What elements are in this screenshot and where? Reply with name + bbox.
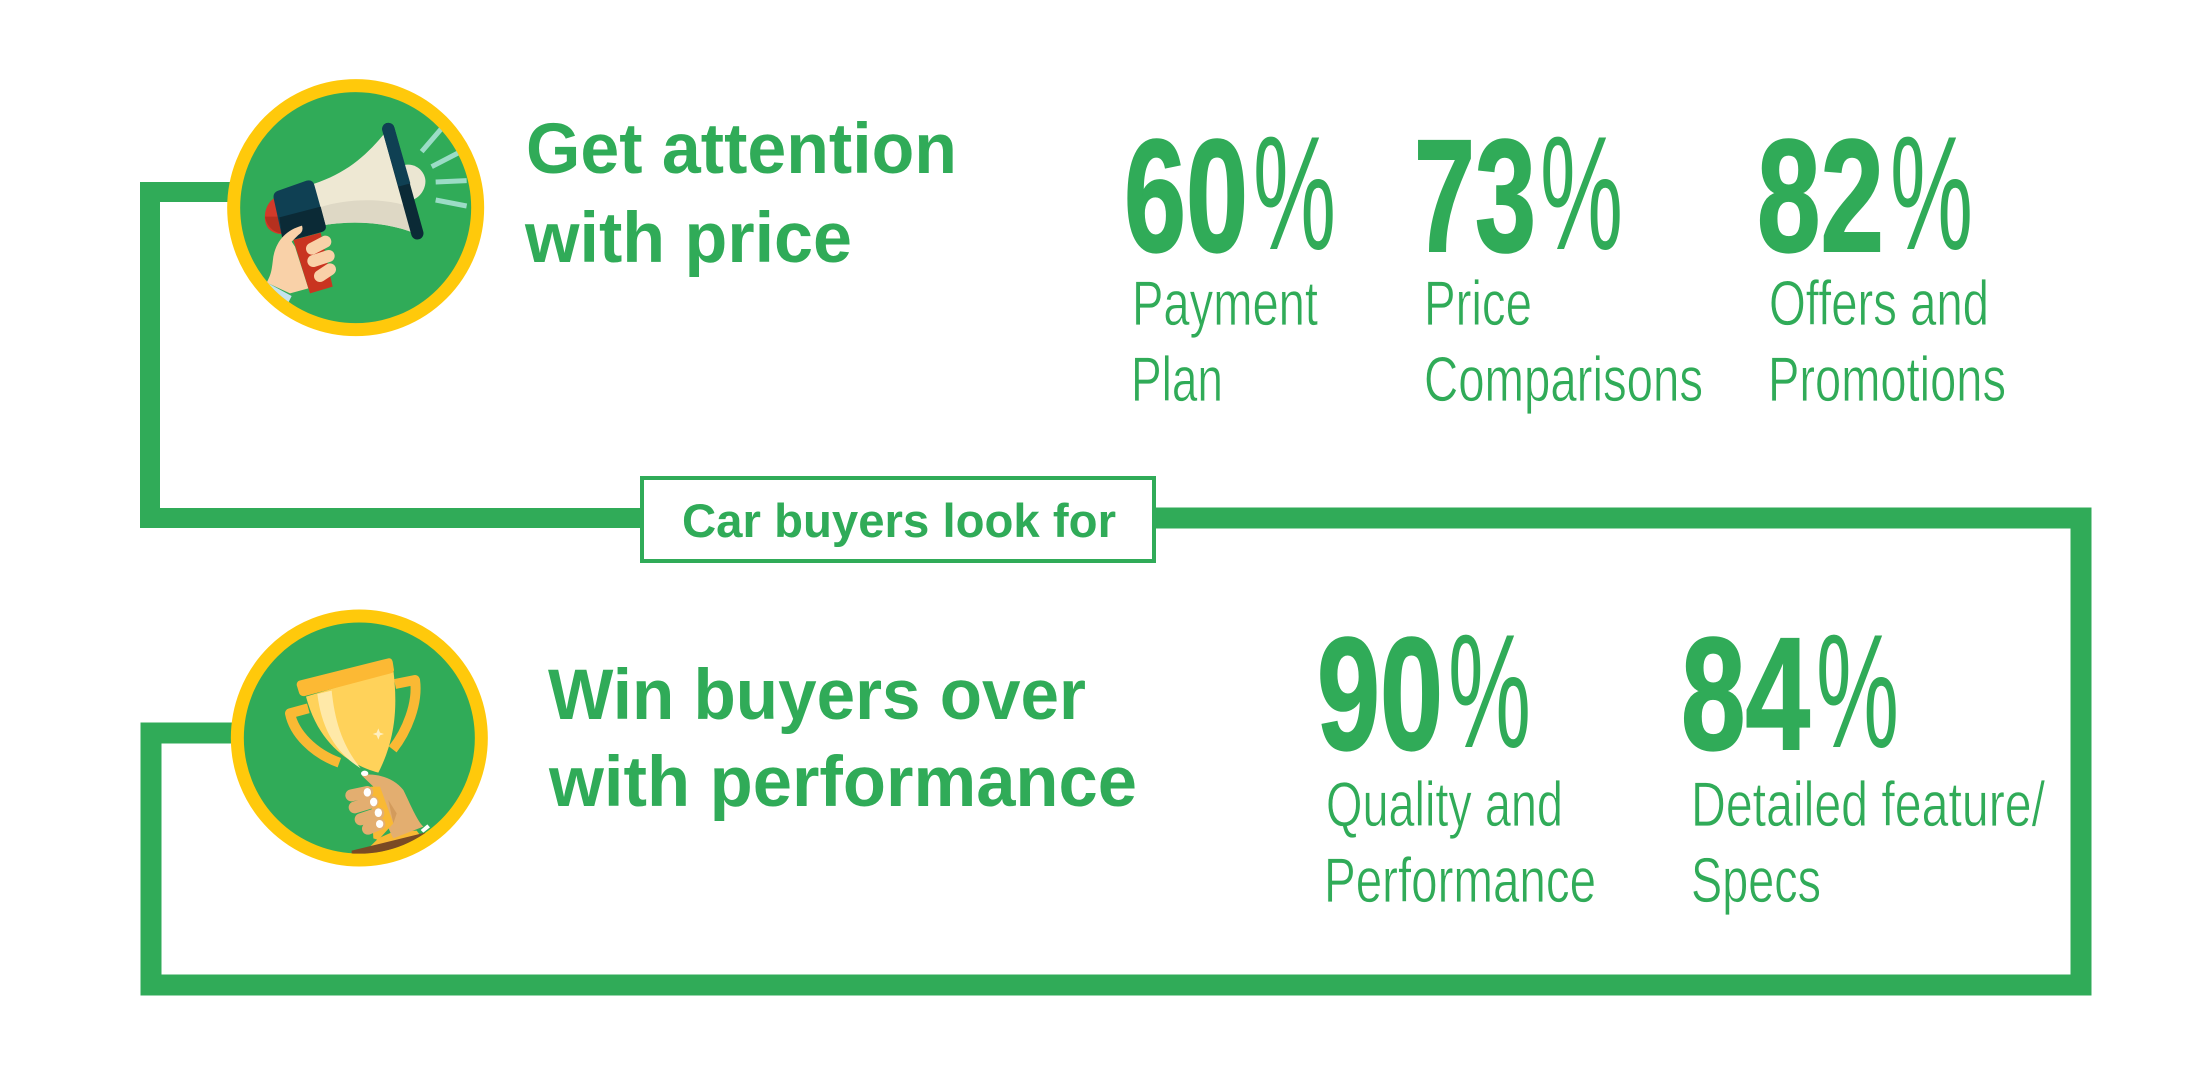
stat: 90% Quality and Performance: % [1448,601,1531,782]
stat: 60% Payment Plan [1124,103,1336,415]
connector line: bottom section [151,518,2081,985]
stat: 84% Detailed feature/Specs [1681,601,2045,916]
stat: 60% Payment Plan: Plan [1131,345,1223,415]
stat: 90% Quality and Performance: 90 [1317,604,1443,783]
label box: Car buyers look for: Car buyers look for [682,494,1116,547]
stat: 82% Offers and Promotions: % [1890,103,1973,284]
stat: 82% Offers and Promotions: Offers and [1769,269,1989,339]
label box: Car buyers look for [642,478,1154,561]
stat: 82% Offers and Promotions: Promotions [1768,345,2006,415]
icon: megaphone badge [234,86,478,330]
heading: Get attention with price: Get attention [526,110,957,189]
heading: Get attention with price [524,110,957,278]
stat: 84% Detailed feature/Specs: % [1816,601,1899,782]
stat: 73% Price Comparisons [1414,103,1703,415]
heading: Win buyers over with performance: with performance [548,743,1137,822]
connector line: top section [150,192,650,518]
heading: Win buyers over with performance [548,656,1137,822]
stat: 90% Quality and Performance: Quality and [1326,770,1563,840]
stat: 84% Detailed feature/Specs: 84 [1681,604,1810,783]
stat: 73% Price Comparisons: Price [1424,269,1532,339]
stat: 73% Price Comparisons: % [1540,103,1623,284]
stat: 90% Quality and Performance [1317,601,1596,916]
stat: 90% Quality and Performance: Performance [1324,846,1596,916]
stat: 73% Price Comparisons: 73 [1414,106,1536,285]
icon: trophy badge [237,616,481,860]
stat: 84% Detailed feature/Specs: Detailed feature/ [1691,770,2045,840]
stat: 73% Price Comparisons: Comparisons [1424,345,1703,415]
stat: 82% Offers and Promotions: 82 [1757,106,1884,285]
stat: 60% Payment Plan: 60 [1124,106,1248,285]
heading: Get attention with price: with price [524,199,852,278]
stat: 60% Payment Plan: Payment [1132,269,1318,339]
stat: 84% Detailed feature/Specs: Specs [1691,846,1821,916]
heading: Win buyers over with performance: Win buyers over [548,656,1086,735]
stat: 82% Offers and Promotions [1757,103,2006,415]
stat: 60% Payment Plan: % [1253,103,1336,284]
